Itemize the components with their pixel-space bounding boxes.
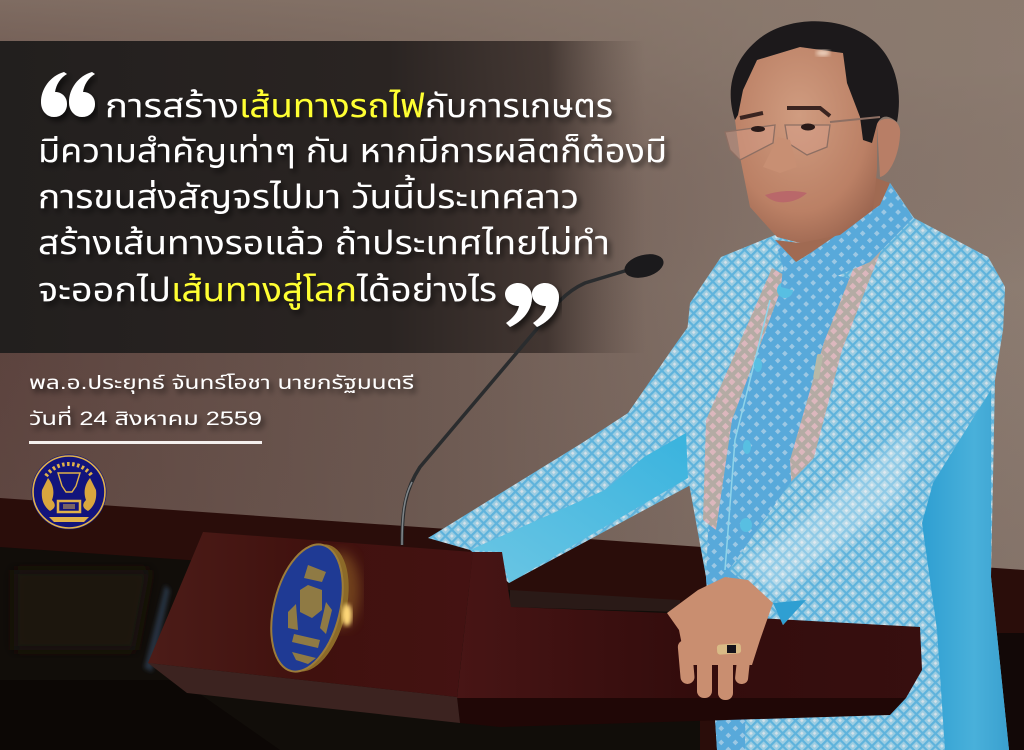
lectern right shelf	[457, 552, 922, 698]
shirt buttons	[740, 282, 793, 532]
neck	[775, 177, 890, 262]
quote text: จะออกไป	[38, 271, 171, 308]
person: torso and left arm in blue Thai silk shirt	[428, 21, 1009, 750]
quote text	[38, 87, 667, 310]
quote text: เส้นทางรถไฟ	[239, 87, 425, 124]
attribution text	[29, 373, 414, 430]
quote text: การสร้าง	[105, 87, 239, 124]
lectern front	[148, 532, 473, 697]
lectern underside shadow	[457, 697, 906, 727]
seal emblem	[288, 565, 332, 664]
attribution text: วันที่ 24 สิงหาคม 2559	[29, 405, 262, 430]
seal face	[259, 537, 355, 679]
icon: government seal	[32, 454, 106, 530]
icon: closing quotation mark	[505, 283, 559, 327]
seal rim	[265, 537, 361, 679]
eyebrows	[740, 108, 830, 118]
seal highlight	[342, 604, 352, 626]
centre placket band	[706, 268, 858, 750]
person: right arm	[667, 230, 1005, 700]
cuff lining	[773, 600, 806, 625]
face	[735, 47, 877, 243]
forehead highlight	[816, 50, 830, 56]
quote text: กับการเกษตร	[425, 87, 613, 124]
brooch	[813, 354, 823, 379]
quote text: สร้างเส้นทางรอแล้ว ถ้าประเทศไทยไม่ทำ	[38, 224, 610, 261]
quote panel	[0, 41, 645, 353]
quote text: การขนส่งสัญจรไปมา วันนี้ประเทศลาว	[38, 174, 579, 215]
mouth	[765, 191, 807, 202]
hair	[731, 21, 899, 143]
microphone	[402, 250, 666, 545]
pink stripe left of placket	[703, 268, 786, 530]
ear	[877, 119, 900, 177]
lectern	[148, 532, 922, 727]
eyes	[751, 124, 815, 132]
hand	[667, 577, 773, 700]
pink stripe right of placket	[790, 248, 882, 495]
collar	[775, 183, 913, 292]
icon: opening quotation mark	[41, 72, 95, 117]
ring	[717, 643, 741, 655]
quote text: เส้นทางสู่โลก	[171, 271, 357, 310]
quote text: มีความสำคัญเท่าๆ กัน หากมีการผลิตก็ต้องมี	[38, 132, 667, 169]
silk highlight	[744, 417, 922, 595]
forearm sleeve	[729, 230, 1005, 625]
quote text: ได้อย่างไร	[356, 271, 497, 308]
torso	[686, 183, 1009, 750]
divider line	[29, 441, 262, 444]
plain blue side panel	[922, 390, 1009, 750]
seal glow	[320, 552, 360, 628]
nose	[763, 137, 797, 173]
placket line	[725, 300, 770, 570]
plain underside of left sleeve	[470, 433, 688, 583]
glasses	[725, 117, 880, 160]
attribution text: พล.อ.ประยุทธ์ จันทร์โอชา นายกรัฐมนตรี	[29, 373, 414, 394]
left sleeve	[428, 310, 720, 583]
lectern underside	[148, 663, 460, 723]
